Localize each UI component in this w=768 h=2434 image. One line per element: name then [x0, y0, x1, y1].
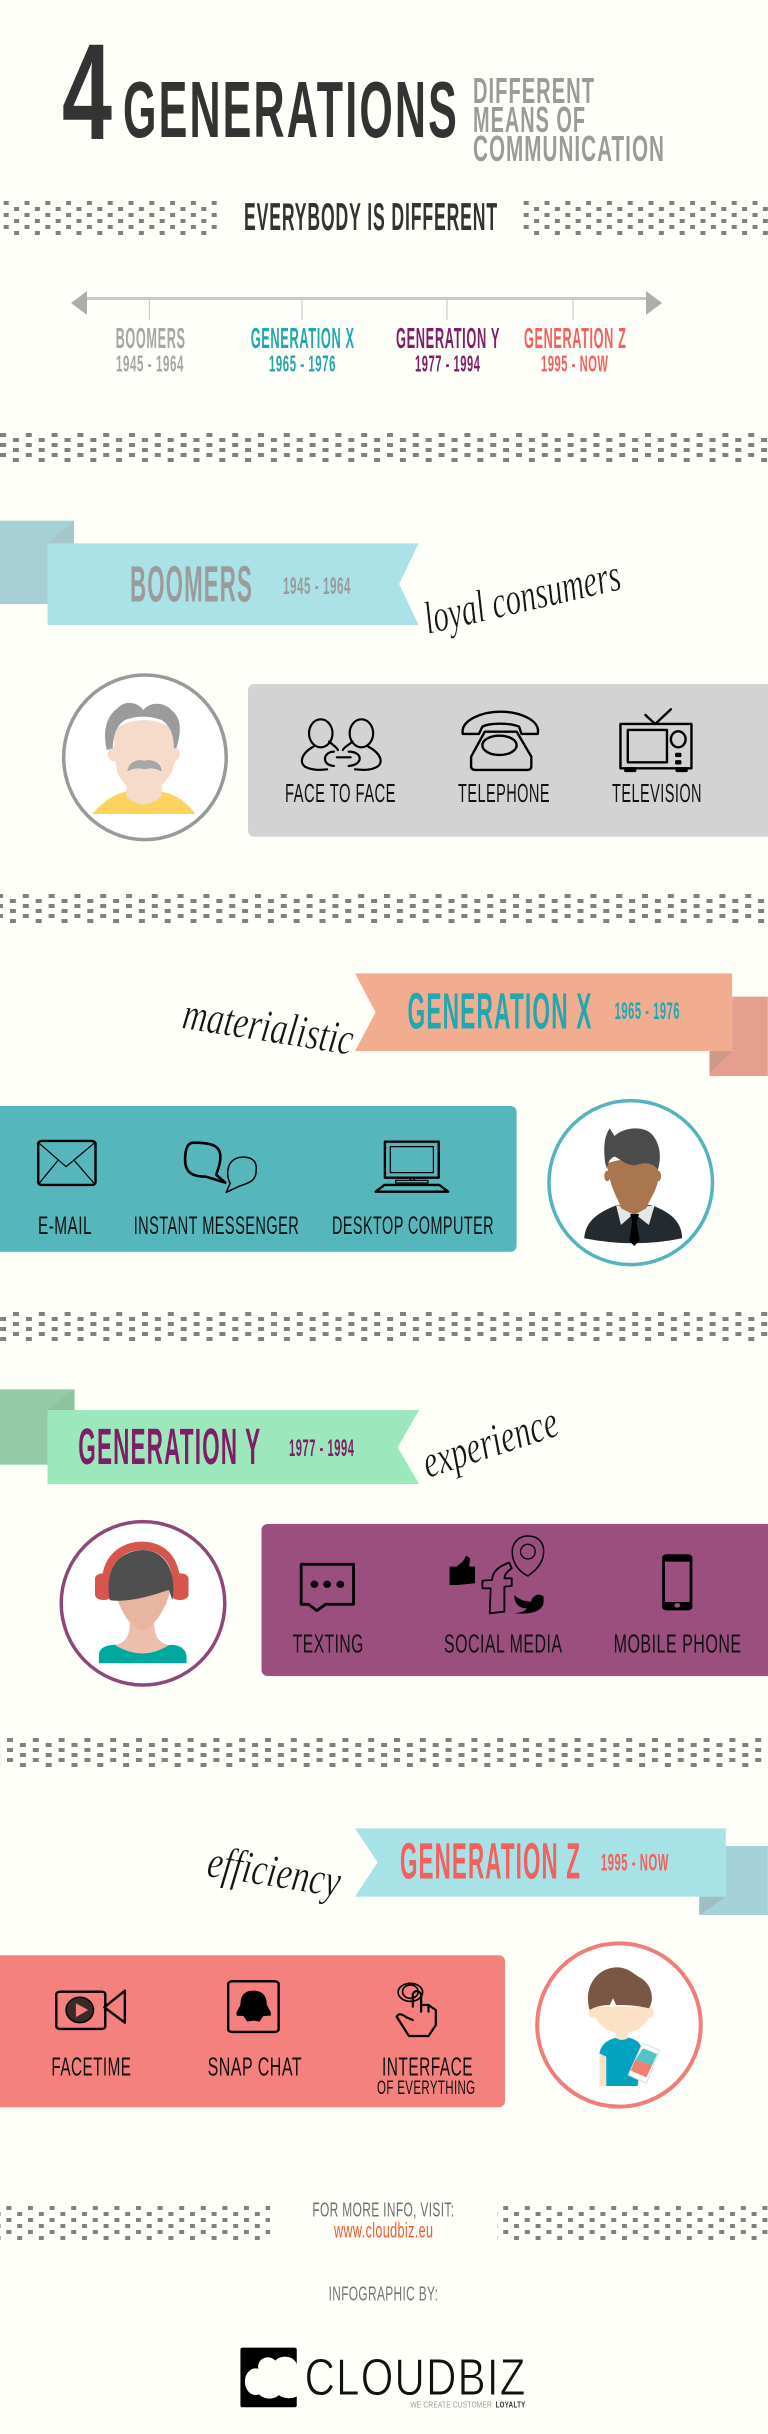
label: social media: SOCIAL MEDIA: [444, 1628, 562, 1658]
timeline: GENERATION Y: [396, 323, 500, 355]
label: desktop computer: DESKTOP COMPUTER: [332, 1212, 494, 1240]
panel: generation y media: [262, 1524, 768, 1676]
subtitle: DIFFERENT: [473, 70, 595, 111]
tagline: loyal consumers: loyal consumers: [419, 549, 625, 644]
icon: face to face: [302, 719, 381, 770]
title: GENERATIONS: [123, 65, 459, 154]
tagline: efficiency: efficiency: [204, 1836, 345, 1907]
logo: cloudbiz: WE CREATE CUSTOMER: [410, 2399, 492, 2409]
ribbon: generation y: GENERATION Y: [78, 1418, 261, 1475]
logo: cloudbiz: CLOUDBIZ: [305, 2349, 527, 2407]
tagline: experience: experience: [415, 1396, 564, 1488]
label: interface of everything: OF EVERYTHING: [377, 2078, 476, 2099]
section: generation y: [0, 1389, 768, 1685]
footer text: more info: [312, 2200, 454, 2243]
section: boomers: [0, 521, 768, 840]
timeline: BOOMERS: [116, 323, 186, 355]
icon: snap chat: [228, 1981, 279, 2032]
arrow: left: [71, 291, 87, 315]
avatar: generation x: [549, 1101, 713, 1265]
timeline: [71, 291, 662, 377]
ribbon: boomers: [0, 521, 419, 625]
section: generation x: [0, 973, 768, 1265]
ribbon: generation x: 1965 - 1976: [615, 998, 680, 1025]
ribbon: generation z: [355, 1828, 768, 1915]
footer text: infographic by: INFOGRAPHIC BY:: [329, 2284, 438, 2306]
ribbon: boomers: BOOMERS: [130, 556, 253, 613]
icon: mobile phone: [664, 1556, 691, 1609]
icon: facetime: [56, 1991, 125, 2029]
icon: telephone: [463, 712, 538, 770]
timeline: GENERATION X: [251, 323, 355, 355]
icon: e-mail: [38, 1141, 95, 1185]
panel: boomers media: [248, 684, 768, 837]
label: e-mail: E-MAIL: [38, 1212, 92, 1240]
timeline label: generation z: 1995 - NOW: [541, 351, 608, 377]
timeline label: generation x: [251, 323, 355, 377]
label: snap chat: SNAP CHAT: [208, 2052, 302, 2082]
icon: instant messenger: [185, 1143, 256, 1192]
ribbon: generation y: [0, 1389, 419, 1484]
label: instant messenger: INSTANT MESSENGER: [134, 1212, 299, 1240]
ribbon: generation y: 1977 - 1994: [289, 1435, 354, 1462]
subtitle: MEANS OF: [473, 99, 586, 140]
avatar: generation y: [61, 1522, 225, 1685]
icon: television: [620, 709, 691, 771]
timeline label: generation z: [524, 323, 626, 377]
avatar: boomer: [64, 675, 226, 840]
arrow: right: [646, 291, 662, 315]
label: face to face: FACE TO FACE: [285, 778, 396, 808]
timeline label: boomers: [116, 323, 186, 377]
timeline label: generation x: 1965 - 1976: [269, 351, 336, 377]
label: facetime: FACETIME: [51, 2052, 131, 2082]
icon: social media: [450, 1536, 544, 1614]
label: interface of everything: INTERFACE: [382, 2052, 473, 2082]
title: 4: [62, 16, 112, 169]
timeline: GENERATION Z: [524, 323, 626, 355]
ribbon: boomers: 1945 - 1964: [283, 573, 351, 600]
timeline label: generation y: [396, 323, 500, 377]
ribbon: generation z: 1995 - NOW: [601, 1849, 669, 1876]
ribbon: generation x: [355, 973, 768, 1076]
footer text: more info: www.cloudbiz.eu: [333, 2220, 433, 2243]
icon: cloud: [240, 2348, 304, 2407]
section: generation z: [0, 1828, 768, 2107]
logo: cloudbiz: [240, 2348, 527, 2409]
logo: cloudbiz: LOYALTY: [496, 2399, 526, 2409]
panel: generation x media: [0, 1106, 517, 1252]
avatar: generation z: [537, 1943, 701, 2107]
timeline label: boomers: 1945 - 1964: [116, 351, 184, 377]
label: texting: TEXTING: [293, 1628, 364, 1658]
title: [62, 16, 459, 169]
timeline label: generation y: 1977 - 1994: [415, 351, 480, 377]
icon: texting: [301, 1564, 354, 1611]
footer text: more info: FOR MORE INFO, VISIT:: [312, 2200, 454, 2222]
icon: desktop computer: [376, 1142, 448, 1192]
label: interface of everything: [377, 2052, 476, 2099]
label: telephone: TELEPHONE: [458, 778, 550, 808]
subtitle: [473, 70, 665, 169]
tagline: materialistic: materialistic: [179, 988, 357, 1065]
panel: generation z media: [0, 1955, 505, 2107]
icon: interface: [397, 1983, 436, 2036]
